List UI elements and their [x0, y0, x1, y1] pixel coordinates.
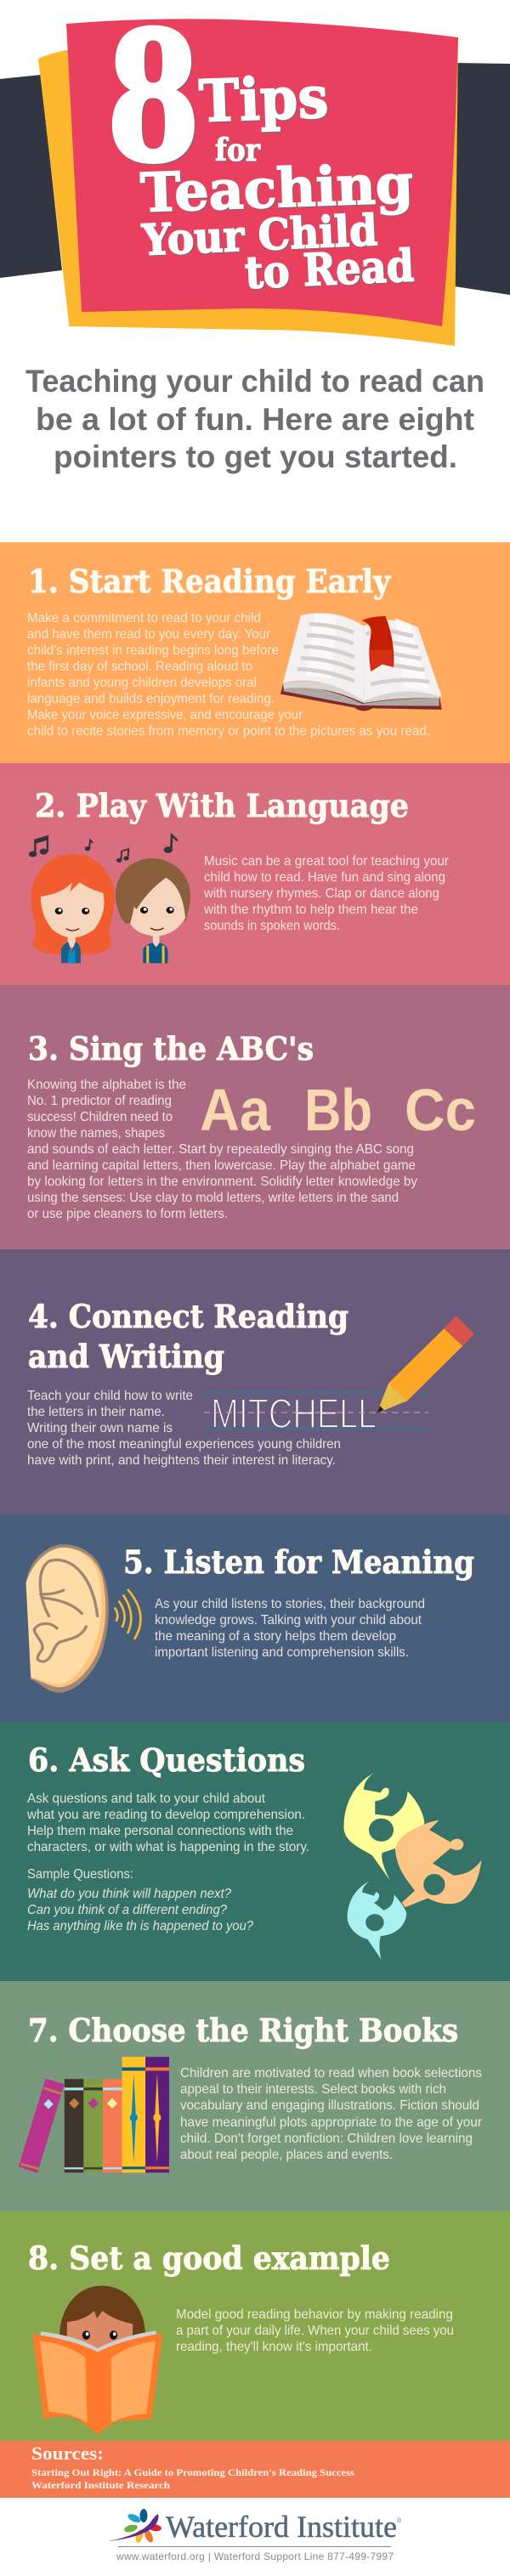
panel: 6 ask questions	[0, 1722, 510, 1981]
body text 3: success! Children need to	[27, 1110, 173, 1124]
body text 7: have meaningful plots appropriate to the age of your	[180, 2115, 483, 2130]
sample questions: Has anything like th is happened to you?	[27, 1919, 253, 1933]
heading 4	[28, 1298, 348, 1375]
body text 6: Ask questions and talk to your child about	[27, 1792, 266, 1806]
body text 6	[26, 1792, 309, 1854]
sources list: Waterford Institute Research	[31, 2479, 170, 2491]
heading 7: 7. Choose the Right Books	[28, 2012, 458, 2049]
body text 1: infants and young children develops oral	[27, 676, 257, 690]
title text: Your Child	[140, 205, 378, 265]
heading 2: 2. Play With Language	[35, 787, 409, 824]
title text: to Read	[244, 240, 415, 299]
panel: 4 connect reading and writing	[0, 1249, 510, 1514]
sample questions: What do you think will happen next?	[27, 1887, 231, 1901]
yellow book page	[38, 37, 458, 346]
handwriting name on ruled lines: MITCHELL	[211, 1391, 377, 1437]
body text 2	[203, 854, 450, 933]
title banner	[0, 0, 510, 346]
body text 8: Model good reading behavior by making reading	[176, 2307, 453, 2322]
sources list: Starting Out Right: A Guide to Promoting Children's Reading Success	[31, 2466, 354, 2478]
body text 1: Make a commitment to read to your child	[27, 611, 261, 626]
body text 6: Help them make personal connections with the	[27, 1824, 293, 1838]
title text: for	[215, 133, 261, 168]
body text 4: Teach your child how to write	[27, 1389, 193, 1403]
red book cover	[66, 19, 458, 326]
body text 4: Writing their own name is	[27, 1421, 173, 1435]
body text 4: the letters in their name.	[27, 1405, 165, 1419]
heading 1: 1. Start Reading Early	[28, 563, 391, 600]
body text 3: and sounds of each letter. Start by repeatedly singing the ABC song	[27, 1142, 414, 1157]
body text 4	[27, 1389, 341, 1468]
contact line: www.waterford.org | Waterford Support Line 877-499-7997	[116, 2551, 394, 2562]
body text 2: child how to read. Have fun and sing along	[204, 870, 445, 885]
panel: 8 set a good example	[0, 2211, 510, 2441]
body text 1: child to recite stories from memory or point to the pictures as you read.	[27, 724, 430, 739]
icon: waterford flower	[108, 2509, 162, 2544]
body text 7: child. Don't forget nonfiction: Children love learning	[180, 2132, 473, 2146]
body text 3: Knowing the alphabet is the	[27, 1078, 186, 1092]
body text 4: have with print, and heightens their interest in literacy.	[27, 1453, 336, 1468]
footer logo	[108, 2509, 402, 2562]
alphabet letters: Aa	[200, 1077, 271, 1143]
body text 7: about real people, places and events.	[180, 2148, 393, 2162]
body text 3	[27, 1078, 417, 1221]
body text 8: reading, they'll know it's important.	[176, 2340, 372, 2354]
body text 2: with nursery rhymes. Clap or dance along	[203, 886, 439, 901]
panel: 7 choose the right books	[0, 1981, 510, 2211]
heading 8: 8. Set a good example	[28, 2239, 390, 2277]
banner ribbon	[0, 63, 510, 295]
icon: singing children	[29, 835, 190, 963]
body text 1	[27, 611, 430, 739]
body text 6: what you are reading to develop comprehension.	[26, 1808, 305, 1822]
alphabet letters: Cc	[405, 1077, 476, 1143]
body text 7	[180, 2066, 483, 2162]
heading 4: and Writing	[28, 1338, 224, 1375]
sample questions: Sample Questions:	[27, 1867, 133, 1882]
icon: open book	[280, 613, 442, 711]
body text 3: and learning capital letters, then lowercase. Play the alphabet game	[27, 1158, 416, 1173]
body text 1: language and builds enjoyment for reading.	[27, 692, 275, 706]
panel: 3 sing the abc's	[0, 985, 510, 1249]
icon: ear with sound waves	[26, 1544, 140, 1693]
body text 3: using the senses: Use clay to mold letters, write letters in the sand	[27, 1191, 399, 1205]
panel: 5 listen for meaning	[0, 1514, 510, 1722]
icon: question speech bubbles	[343, 1772, 481, 1960]
body text 1: Make your voice expressive, and encourage your	[27, 708, 303, 722]
body text 5: important listening and comprehension skills.	[155, 1645, 409, 1660]
body text 6: characters, or with what is happening in the story.	[27, 1840, 309, 1854]
logotype: Waterford Institute	[166, 2510, 397, 2544]
body text 3: or use pipe cleaners to form letters.	[27, 1207, 228, 1221]
body text 3: No. 1 predictor of reading	[27, 1094, 172, 1108]
heading 5: 5. Listen for Meaning	[123, 1543, 474, 1581]
sample questions	[27, 1867, 253, 1933]
intro text	[26, 364, 484, 474]
sources list	[31, 2466, 354, 2491]
body text 5: the meaning of a story helps them develop	[155, 1629, 396, 1644]
panel: sources	[0, 2441, 510, 2498]
alphabet letters: Bb	[304, 1077, 372, 1143]
icon: row of books	[19, 2057, 169, 2173]
heading 6: 6. Ask Questions	[28, 1741, 305, 1779]
body text 2: with the rhythm to help them hear the	[203, 903, 418, 917]
icon: pencil	[377, 1316, 474, 1413]
body text 5	[155, 1597, 425, 1660]
body text 7: appeal to their interests. Select books with rich	[180, 2082, 446, 2097]
music notes	[29, 835, 178, 863]
body text 7: Children are motivated to read when book selections	[180, 2066, 482, 2081]
body text 2: sounds in spoken words.	[204, 919, 340, 933]
heading 4: 4. Connect Reading	[28, 1298, 348, 1335]
icon: child reading a book	[32, 2285, 162, 2434]
intro text: pointers to get you started.	[54, 439, 457, 474]
intro text: be a lot of fun. Here are eight	[36, 402, 474, 437]
intro text: Teaching your child to read can	[26, 364, 484, 399]
title text: 8	[107, 0, 200, 201]
title text	[107, 0, 415, 299]
body text 1: the first day of school. Reading aloud to	[27, 660, 252, 674]
registered mark: ®	[397, 2517, 402, 2524]
panel: 2 play with language	[0, 763, 510, 985]
body text 1: and have them read to you every day. Your	[27, 627, 271, 642]
body text 8	[176, 2307, 454, 2354]
panel: 1 start reading early	[0, 542, 510, 763]
body text 5: As your child listens to stories, their background	[155, 1597, 425, 1611]
divider line	[118, 2546, 391, 2547]
body text 5: knowledge grows. Talking with your child about	[155, 1613, 422, 1628]
sources heading: Sources:	[31, 2443, 104, 2464]
body text 2: Music can be a great tool for teaching your	[204, 854, 450, 869]
girl	[31, 854, 115, 955]
body text 1: child's interest in reading begins long before	[27, 643, 279, 658]
boy	[116, 858, 190, 924]
body text 3: by looking for letters in the environment. Solidify letter knowledge by	[27, 1175, 417, 1189]
sample questions: Can you think of a different ending?	[27, 1903, 227, 1917]
body text 7: vocabulary and engaging illustrations. Fiction should	[180, 2098, 479, 2113]
body text 8: a part of your daily life. When your child sees you	[176, 2324, 454, 2338]
heading 3: 3. Sing the ABC's	[28, 1030, 314, 1067]
body text 3: know the names, shapes	[27, 1126, 165, 1141]
title text: Tips	[198, 64, 330, 136]
title text: Teaching	[139, 152, 414, 224]
body text 4: one of the most meaningful experiences young children	[27, 1437, 341, 1452]
alphabet letters	[200, 1077, 476, 1143]
